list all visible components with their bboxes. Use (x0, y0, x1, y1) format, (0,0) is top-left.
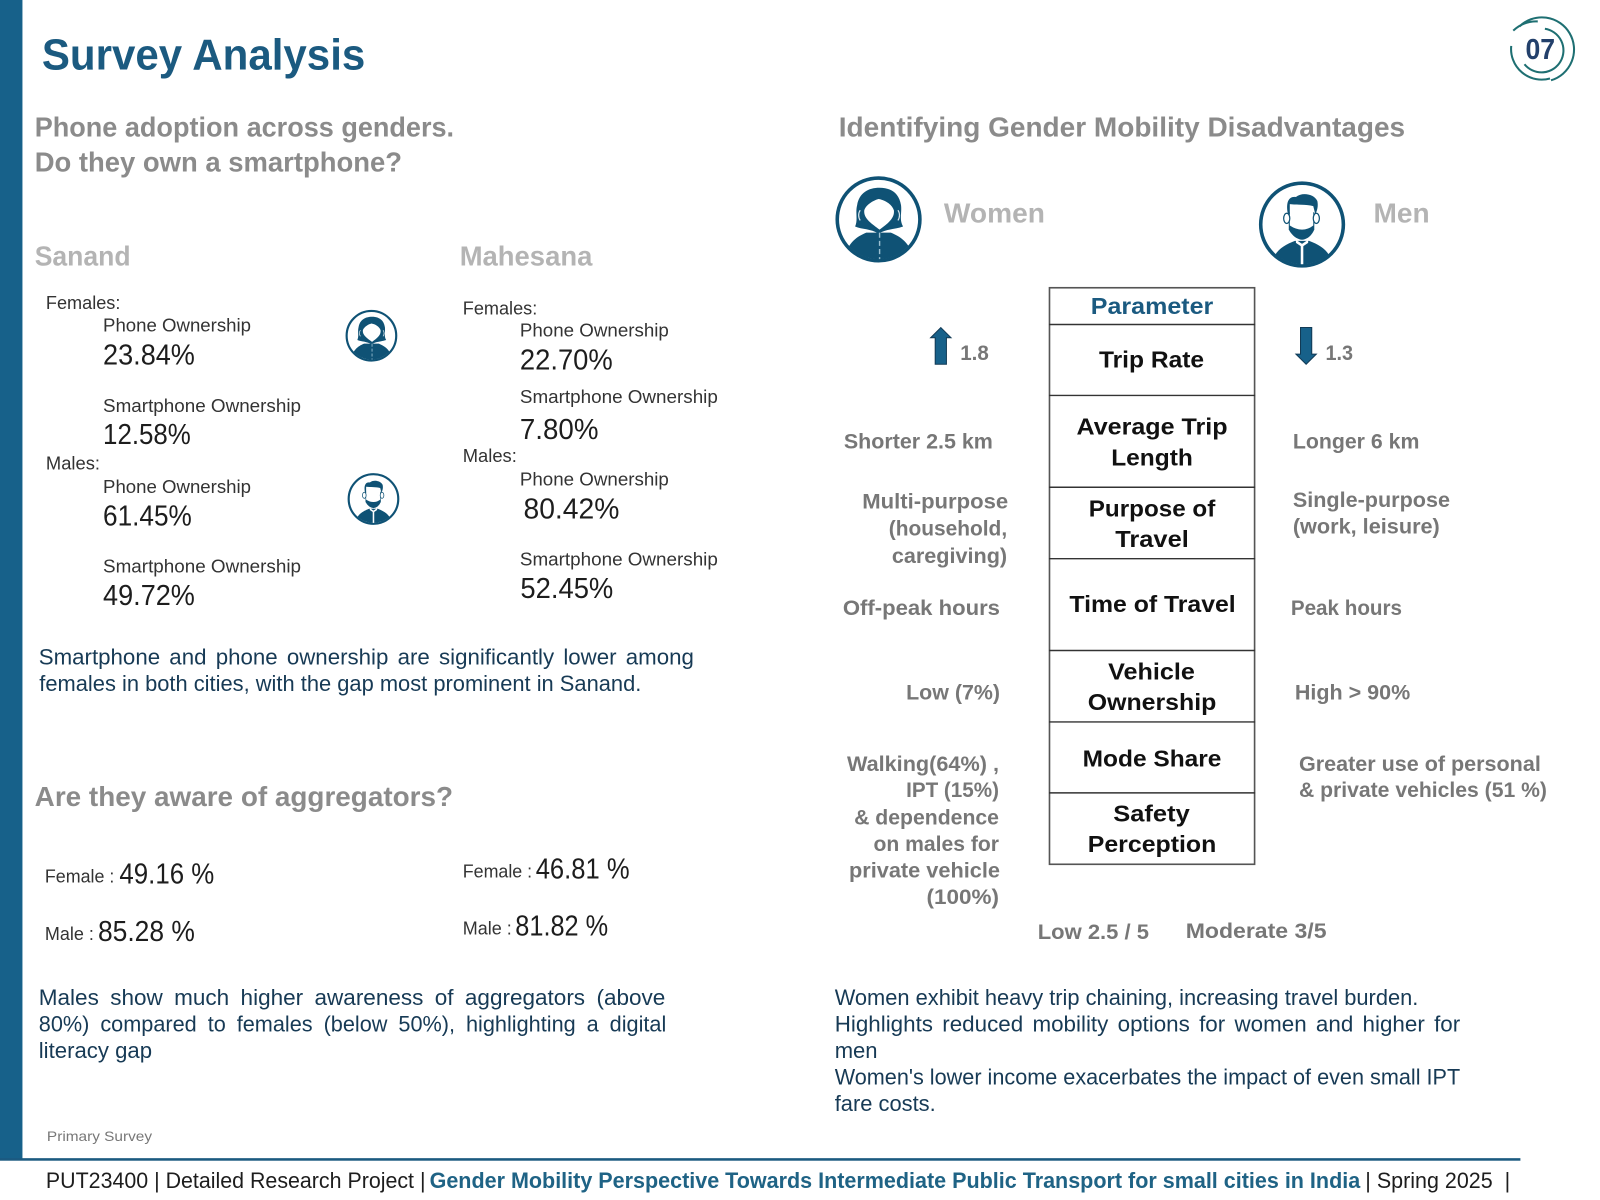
footer (0, 1158, 1520, 1193)
takeaway: mobility: Women's lower income exacerbates the impact of even small IPT (835, 1065, 1460, 1090)
Sanand female stats: 12.58% (103, 419, 191, 451)
table: parameters: Parameter (1091, 293, 1213, 319)
women values: Walking(64%) , (847, 752, 999, 776)
icon: woman (837, 178, 920, 267)
Sanand awareness stats: Female : (45, 866, 114, 887)
Mahesana female stats: 7.80% (520, 414, 598, 446)
table: parameters: Time of Travel (1069, 591, 1236, 617)
takeaway: phone ownership: females in both cities, with the gap most prominent in Sanand. (39, 671, 641, 696)
icon: man small (349, 474, 398, 528)
Mahesana female stats: 22.70% (520, 344, 613, 376)
takeaway: aggregators (39, 985, 666, 1063)
label: men: Men (1373, 197, 1430, 228)
table: parameters: Ownership (1088, 689, 1216, 715)
men values: & private vehicles (51 %) (1299, 778, 1547, 802)
label: women: Women (944, 197, 1045, 228)
takeaway: aggregators: literacy gap (39, 1038, 152, 1063)
women values: & dependence (854, 805, 999, 829)
Sanand male stats (46, 452, 301, 612)
Mahesana male stats: Phone Ownership (520, 469, 669, 490)
table: parameters: Mode Share (1083, 745, 1221, 771)
footer: Gender Mobility Perspective Towards Intermediate Public Transport for small cities in India (430, 1168, 1361, 1193)
table: parameters: Purpose of (1089, 495, 1215, 521)
women values: caregiving) (892, 544, 1007, 568)
Sanand female stats: Phone Ownership (103, 315, 251, 336)
Mahesana awareness stats: Male : (463, 918, 512, 939)
women values: IPT (15%) (906, 778, 999, 802)
icon: man (1261, 183, 1343, 272)
men values: Moderate 3/5 (1186, 919, 1327, 943)
table: parameters: Safety (1113, 800, 1190, 826)
Mahesana awareness stats: 81.82 % (515, 911, 608, 943)
men values: Single-purpose (1293, 488, 1450, 512)
women values: (100%) (927, 885, 999, 909)
heading: aggregators: Are they aware of aggregators? (35, 781, 453, 812)
table: parameters: Length (1111, 444, 1193, 470)
value: men trip rate: 1.3 (1326, 341, 1353, 365)
women values: private vehicle (849, 859, 1000, 883)
Sanand awareness stats (45, 859, 214, 948)
Mahesana male stats: 80.42% (523, 493, 619, 525)
page number badge: 07 (1526, 34, 1555, 66)
panel: aggregator awareness (35, 781, 666, 1063)
city heading: Sanand: Sanand (35, 240, 131, 271)
Sanand male stats: Smartphone Ownership (103, 555, 301, 576)
heading: phone adoption: Do they own a smartphone? (35, 146, 402, 177)
takeaway: mobility: Women exhibit heavy trip chaining, increasing travel burden. (835, 985, 1418, 1010)
women values: Shorter 2.5 km (844, 429, 993, 453)
footer: | Spring 2025 | (1365, 1168, 1510, 1193)
sidebar accent (0, 0, 22, 1160)
takeaway: mobility: Highlights reduced mobility options for women and higher for (835, 1012, 1461, 1037)
takeaway: aggregators: Males show much higher awareness of aggregators (above (39, 985, 665, 1010)
footer: PUT23400 | Detailed Research Project | (46, 1168, 426, 1193)
men values: High > 90% (1295, 680, 1410, 704)
Sanand awareness stats: 85.28 % (98, 916, 195, 948)
women values: on males for (873, 832, 999, 856)
title: Survey Analysis (42, 30, 365, 79)
value: women trip rate: 1.8 (960, 341, 989, 365)
arrow up: women trip rate (931, 328, 951, 364)
heading: phone adoption (35, 112, 454, 177)
Sanand awareness stats: 49.16 % (119, 859, 214, 891)
takeaway: phone ownership (39, 644, 694, 696)
Sanand male stats: 61.45% (103, 501, 192, 533)
column: Mahesana (460, 240, 718, 605)
takeaway: mobility: fare costs. (835, 1091, 936, 1116)
Mahesana awareness stats: 46.81 % (536, 854, 630, 886)
table: parameters (1049, 288, 1255, 864)
icon: woman small (347, 311, 396, 364)
men values: Peak hours (1291, 596, 1402, 620)
Mahesana female stats: Phone Ownership (520, 320, 669, 341)
table: parameters: Vehicle (1108, 659, 1195, 685)
Sanand female stats: 23.84% (103, 339, 195, 371)
women values: Multi-purpose (862, 490, 1008, 514)
Sanand male stats: Males: (46, 452, 100, 473)
men values (1186, 429, 1547, 943)
Mahesana female stats: Smartphone Ownership (520, 386, 718, 407)
column: Sanand (35, 240, 398, 612)
women values: Low 2.5 / 5 (1038, 920, 1149, 944)
Mahesana male stats: 52.45% (520, 573, 613, 605)
source note: Primary Survey (47, 1129, 153, 1145)
arrow down: men trip rate (1296, 328, 1316, 364)
women values: Low (7%) (906, 680, 1000, 704)
Sanand male stats: 49.72% (103, 580, 195, 612)
table: parameters: Travel (1115, 526, 1189, 552)
Sanand male stats: Phone Ownership (103, 476, 251, 497)
heading: phone adoption: Phone adoption across genders. (35, 112, 454, 143)
Mahesana awareness stats (463, 854, 630, 943)
Sanand female stats (46, 292, 301, 451)
Sanand awareness stats: Male : (45, 923, 94, 944)
table: parameters: Trip Rate (1099, 346, 1204, 372)
women values: (household, (889, 517, 1007, 541)
panel: gender mobility disadvantages (835, 112, 1547, 1116)
Sanand female stats: Females: (46, 292, 120, 313)
panel: phone adoption (35, 112, 718, 696)
Mahesana awareness stats: Female : (463, 861, 532, 882)
takeaway: mobility: men (835, 1038, 878, 1063)
takeaway: phone ownership: Smartphone and phone ownership are significantly lower among (39, 644, 694, 669)
city heading: Mahesana: Mahesana (460, 240, 593, 271)
takeaway: mobility (835, 985, 1461, 1116)
Mahesana male stats: Smartphone Ownership (520, 548, 718, 569)
Mahesana male stats: Males: (463, 445, 517, 466)
takeaway: aggregators: 80%) compared to females (below 50%), highlighting a digital (39, 1012, 666, 1037)
women values (843, 429, 1149, 944)
women values: Off-peak hours (843, 596, 1000, 620)
table: parameters: Average Trip (1077, 414, 1228, 440)
table: parameters: Perception (1088, 831, 1216, 857)
men values: Greater use of personal (1299, 752, 1541, 776)
Mahesana male stats (463, 445, 718, 605)
men values: Longer 6 km (1293, 429, 1419, 453)
page number badge (1511, 17, 1574, 80)
men values: (work, leisure) (1293, 515, 1440, 539)
Mahesana female stats: Females: (463, 297, 537, 318)
Mahesana female stats (463, 297, 718, 446)
Sanand female stats: Smartphone Ownership (103, 395, 301, 416)
heading: disadvantages: Identifying Gender Mobility Disadvantages (839, 112, 1405, 143)
